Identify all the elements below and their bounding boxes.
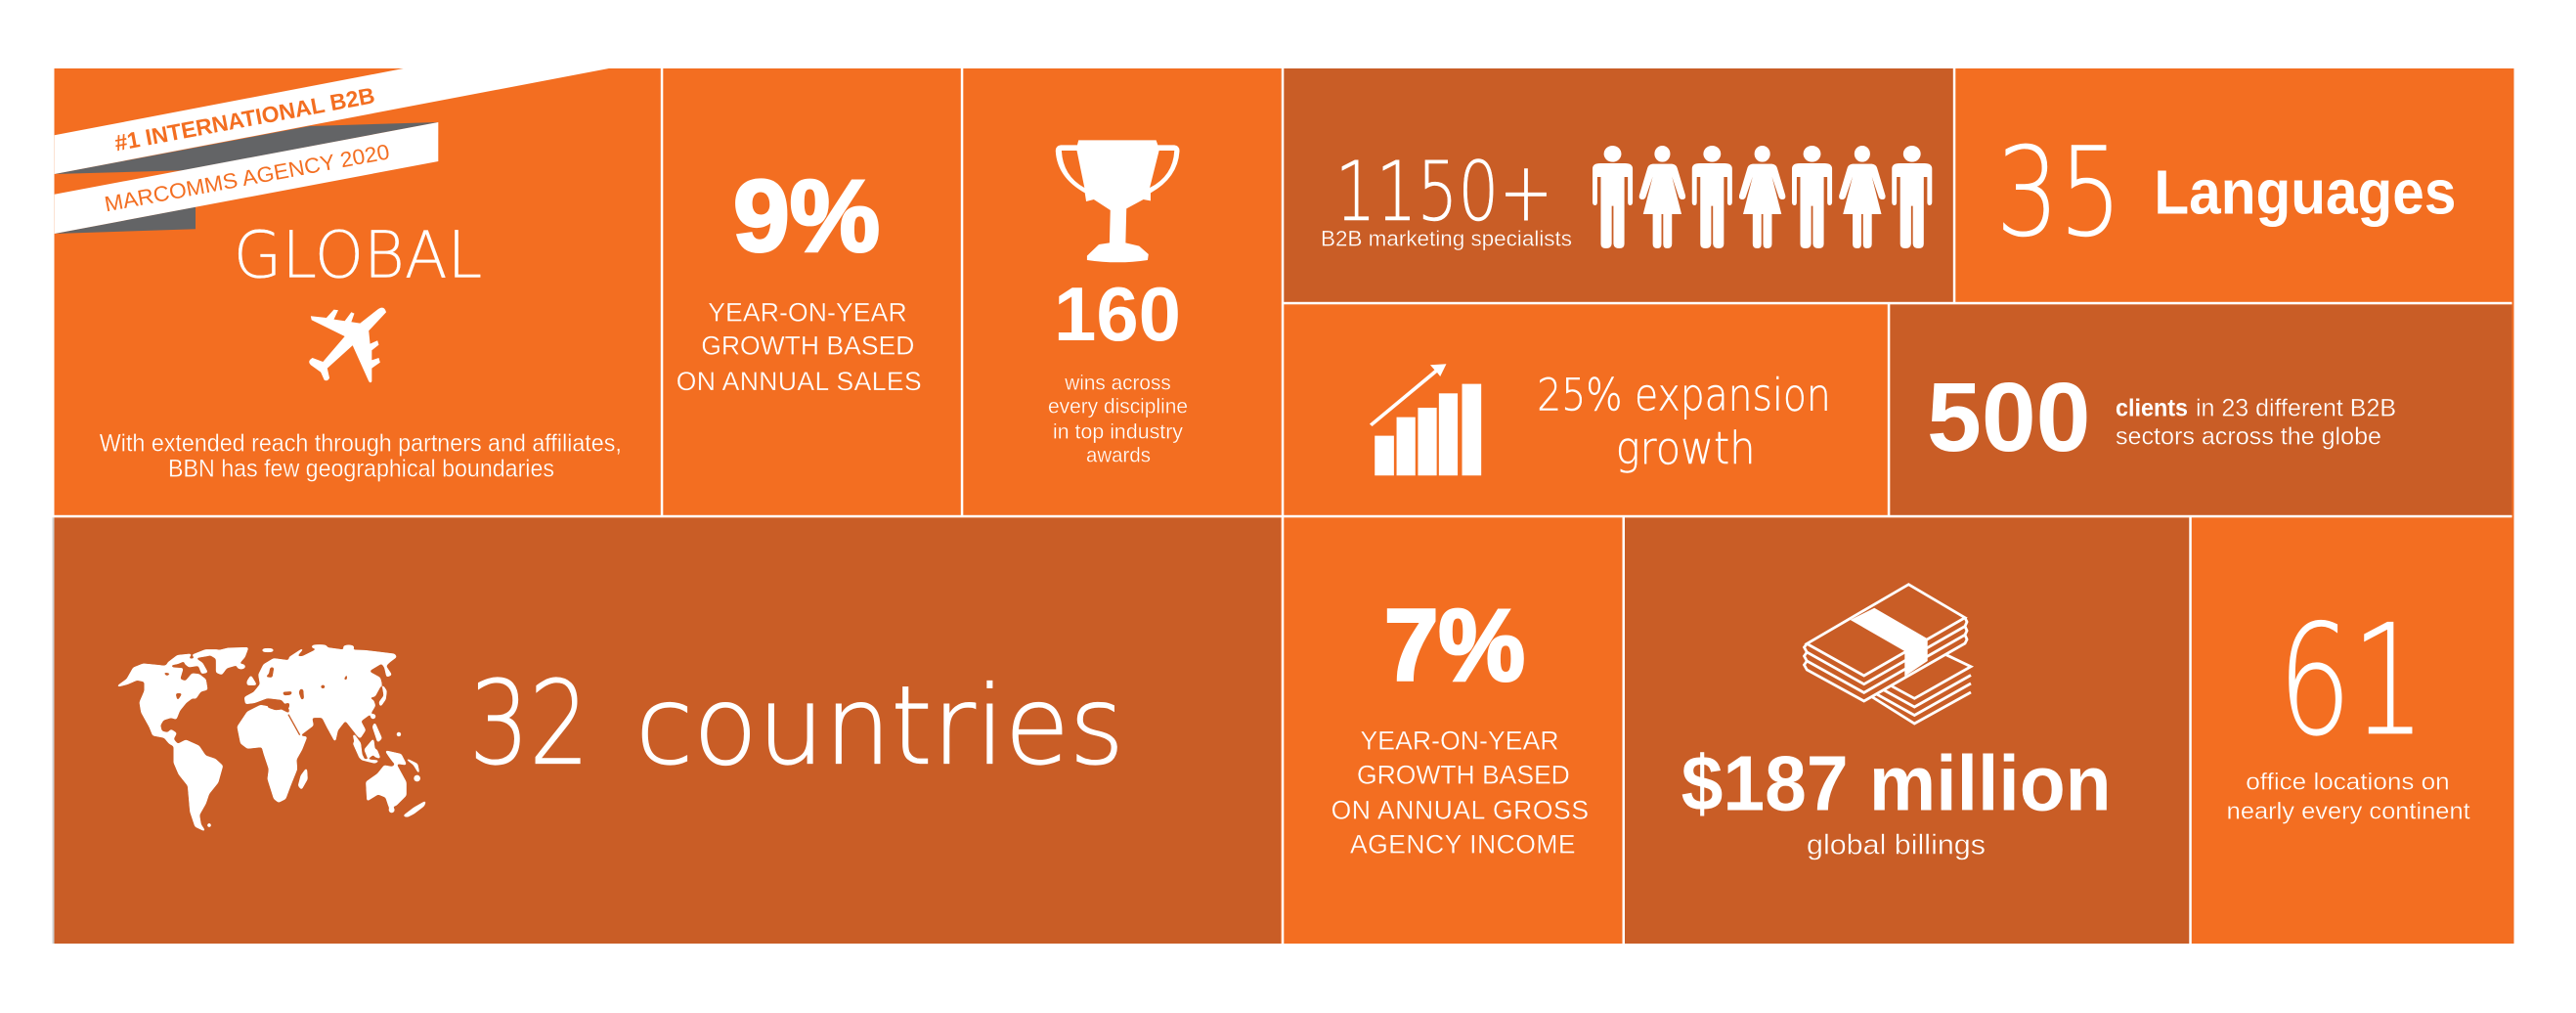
text: global description: BBN has few geographical boundaries xyxy=(168,456,554,483)
text: 25% expansion growth: 25% expansion xyxy=(1537,369,1831,420)
icon: rising bar chart xyxy=(1370,364,1481,475)
text: offices description: office locations on xyxy=(2246,770,2450,796)
text: global billings: global billings xyxy=(1807,829,1986,860)
panel: 32 countries xyxy=(55,518,1281,944)
text: clients description: clients xyxy=(2116,395,2188,422)
text: 32 countries: countries xyxy=(635,664,1124,790)
text: B2B marketing specialists: B2B marketing specialists xyxy=(1321,227,1572,251)
text: awards description: awards xyxy=(1086,445,1151,467)
panel: clients xyxy=(1891,305,2512,515)
text: 7% description: YEAR-ON-YEAR xyxy=(1361,727,1558,756)
panel: global xyxy=(55,68,661,515)
ribbon: #1 international B2B marcomms agency 2020: MARCOMMS AGENCY 2020 xyxy=(103,139,391,216)
icon: world map xyxy=(118,645,425,830)
ribbon: #1 international B2B marcomms agency 2020 xyxy=(55,68,609,234)
panel: 7% growth xyxy=(1284,518,1623,944)
panel: billings xyxy=(1625,518,2190,944)
text: global description xyxy=(100,430,622,483)
stat: 1150+: 1150+ xyxy=(1335,144,1553,240)
text: 32 countries xyxy=(469,656,1124,791)
text: global description: With extended reach through partners and affiliates, xyxy=(100,430,622,458)
icon: plane xyxy=(309,308,386,382)
panel: 9% growth xyxy=(663,68,962,515)
stat: 35: 35 xyxy=(1996,120,2122,264)
text: offices description xyxy=(2227,770,2470,825)
text: 7% description xyxy=(1332,727,1589,859)
text: awards description: in top industry xyxy=(1053,420,1183,443)
panel: languages xyxy=(1955,68,2514,302)
text: 25% expansion growth: growth xyxy=(1616,422,1756,474)
text: 9% description: GROWTH BASED xyxy=(701,331,914,361)
ribbon: #1 international B2B marcomms agency 2020: #1 INTERNATIONAL B2B xyxy=(112,82,376,155)
text: 7% description: GROWTH BASED xyxy=(1357,761,1570,790)
panel: offices xyxy=(2192,518,2514,944)
text: 7% description: AGENCY INCOME xyxy=(1350,830,1576,859)
text: awards description: every discipline xyxy=(1048,396,1188,418)
stat: 500: 500 xyxy=(1927,363,2090,472)
stat: $187 million: $187 million xyxy=(1681,739,2112,826)
icon: trophy xyxy=(1056,140,1179,262)
heading: GLOBAL: GLOBAL xyxy=(234,217,482,292)
stat: 61: 61 xyxy=(2278,592,2425,770)
panel: awards xyxy=(964,68,1282,515)
text: 9% description: ON ANNUAL SALES xyxy=(677,367,922,396)
text: 32 countries: 32 xyxy=(469,656,589,791)
text: 7% description: ON ANNUAL GROSS xyxy=(1332,796,1589,825)
text: awards description xyxy=(1048,372,1188,467)
icon: row of people xyxy=(1593,146,1932,248)
text: offices description: nearly every continent xyxy=(2227,799,2470,825)
panel: expansion growth xyxy=(1284,305,1888,515)
text: 9% description: YEAR-ON-YEAR xyxy=(708,297,907,327)
text: Languages: Languages xyxy=(2154,156,2456,227)
text: awards description: wins across xyxy=(1064,372,1171,394)
text: clients description xyxy=(2116,395,2396,450)
stat: 9%: 9% xyxy=(733,160,880,274)
stat: 160: 160 xyxy=(1054,271,1181,357)
text: clients description: sectors across the globe xyxy=(2116,422,2381,450)
text: 25% expansion growth xyxy=(1537,369,1831,474)
text: 9% description xyxy=(677,297,922,396)
icon: money stacks xyxy=(1805,585,1971,724)
panel: specialists xyxy=(1284,68,1953,302)
stat: 7%: 7% xyxy=(1384,589,1525,702)
text: clients description: in 23 different B2B xyxy=(2196,395,2396,422)
